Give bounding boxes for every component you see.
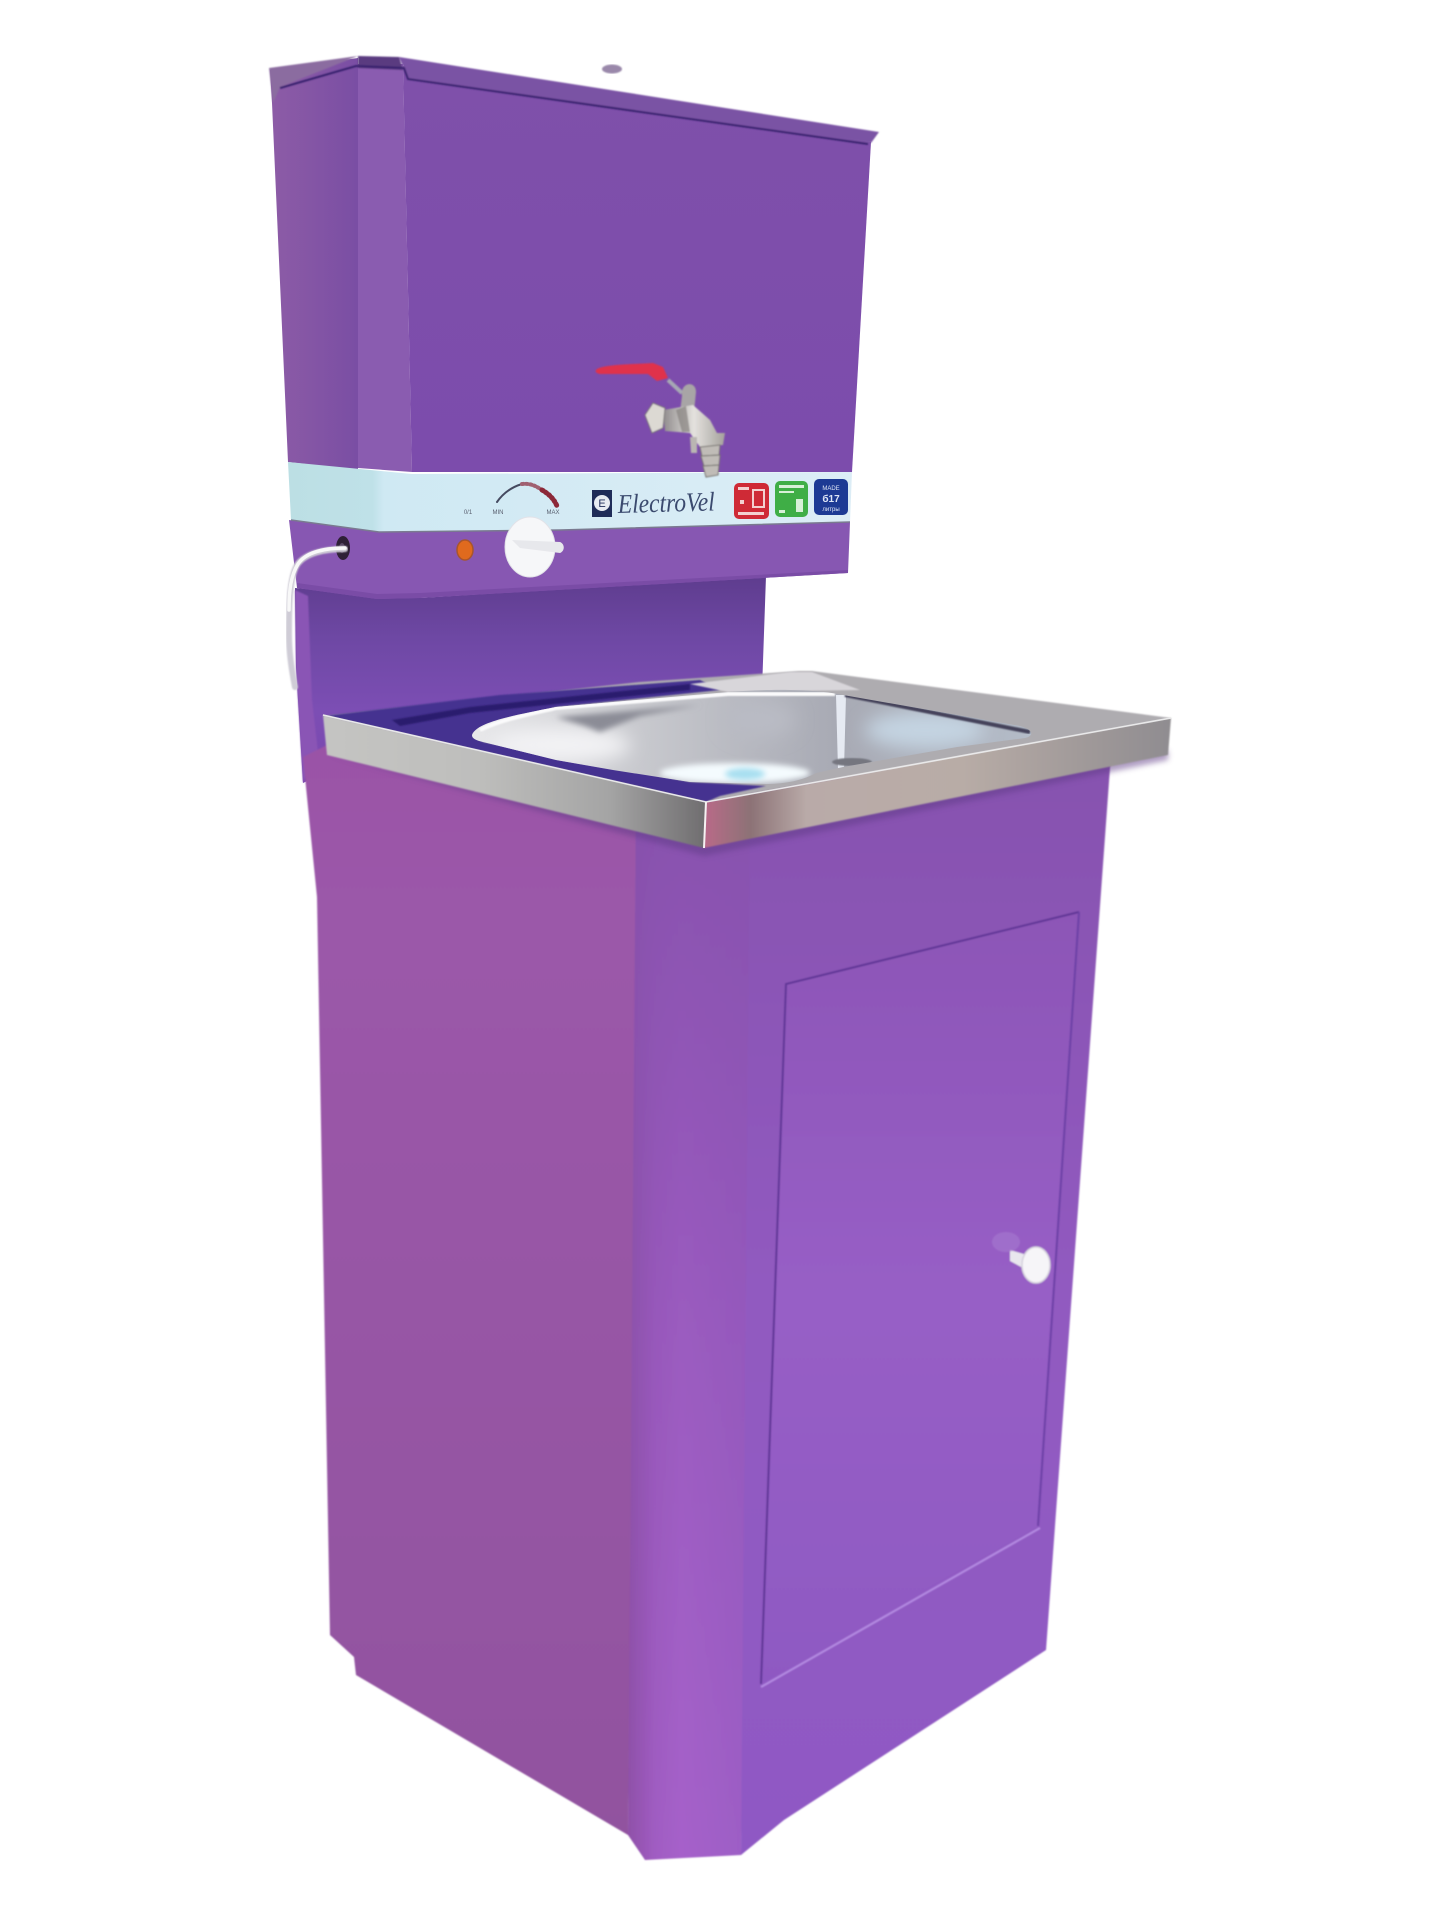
- dial labels: MAX: [546, 510, 560, 516]
- tap red handle: [596, 363, 668, 381]
- product illustration: ElectroVel purple wash stand: [268, 54, 1172, 1861]
- tank left side: [270, 58, 358, 470]
- indicator lamp: [457, 540, 473, 560]
- back panel: [295, 576, 766, 783]
- cabinet front face: [741, 740, 1113, 1855]
- sink front right edge: [704, 718, 1171, 848]
- stainless sink: [323, 671, 1171, 848]
- tap hose barb: [700, 445, 720, 477]
- brand name: ElectroVel: [617, 486, 715, 519]
- sink front left edge: [323, 715, 706, 848]
- cabinet: [303, 740, 1113, 1860]
- cabinet left face: [303, 745, 640, 1835]
- cabinet corner strip: [628, 800, 761, 1860]
- blue badge: MADE: [822, 486, 840, 492]
- sink basin: [472, 690, 1031, 784]
- sink top plane: [324, 671, 1171, 802]
- red badge: [734, 483, 769, 519]
- brand logo: [592, 490, 612, 517]
- tank lower front: [289, 520, 850, 599]
- dial labels: MIN: [492, 510, 504, 516]
- blue badge: [814, 479, 848, 515]
- power cable socket: [336, 536, 350, 560]
- dial labels: [464, 510, 560, 516]
- lid top button: [602, 64, 622, 74]
- door knob: [992, 1232, 1050, 1283]
- brand logo: E: [598, 498, 606, 510]
- cabinet door: [761, 912, 1079, 1687]
- water tap: [596, 363, 725, 477]
- power cable: [289, 548, 345, 687]
- tap body: [645, 384, 725, 453]
- water tank: [269, 56, 879, 599]
- temperature knob: [505, 517, 564, 577]
- sink shadow: [328, 750, 1168, 856]
- tank corner strip: [358, 64, 412, 472]
- tank front: [403, 66, 871, 472]
- tank lid: [269, 56, 879, 144]
- blue badge: литры: [822, 507, 840, 513]
- green badge: [775, 481, 808, 517]
- blue badge: б17: [822, 493, 840, 505]
- dark purple reflection: [324, 680, 766, 802]
- dial labels: 0/1: [464, 510, 473, 516]
- temperature dial scale: [497, 484, 557, 506]
- control label band: [288, 462, 852, 532]
